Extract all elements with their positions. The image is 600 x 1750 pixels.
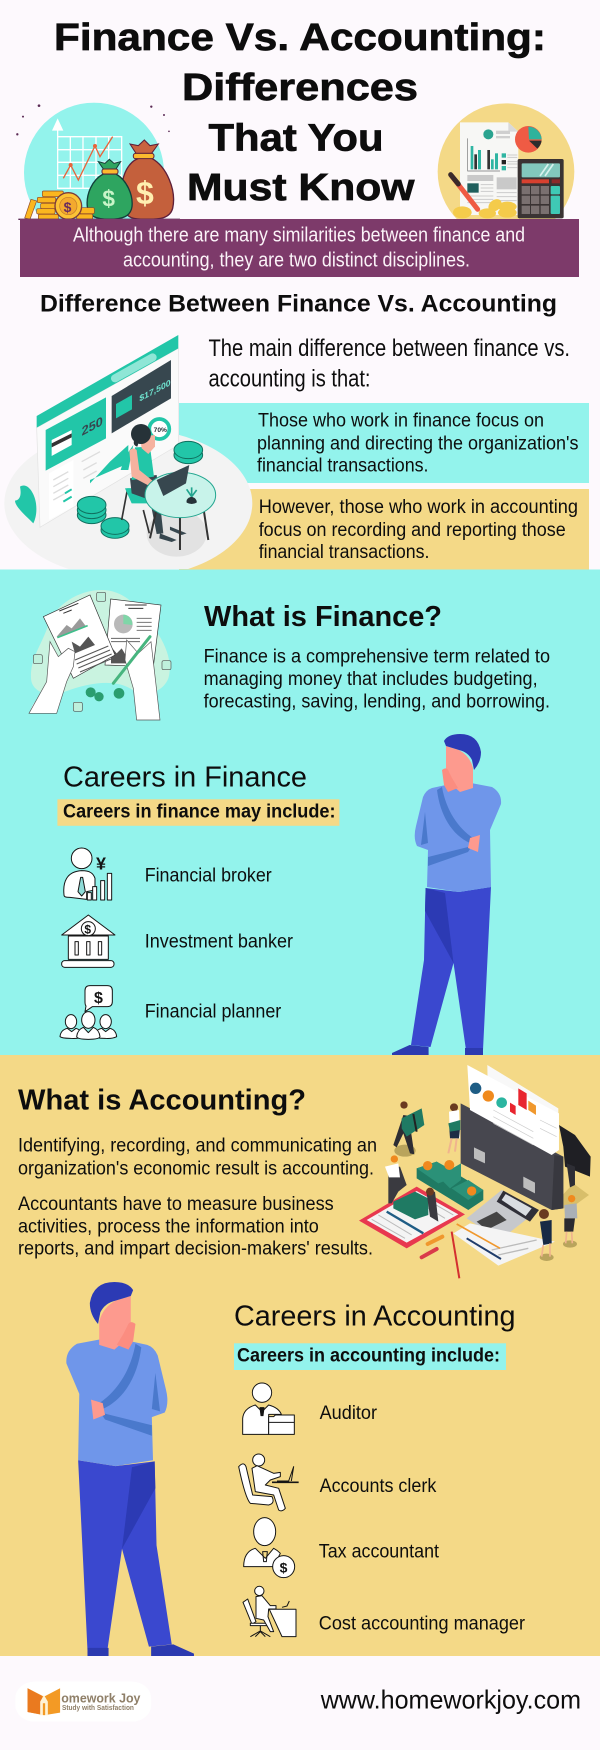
- icon: financial planner: [60, 986, 117, 1039]
- panel: finance section background: [0, 570, 600, 1056]
- illustration: woman at dashboard: [4, 335, 252, 578]
- panel: finance focus: financial transactions.: [257, 456, 428, 477]
- heading: what is accounting: What is Accounting?: [18, 1084, 306, 1116]
- intro banner: Although there are many similarities between finance and: [73, 224, 525, 246]
- intro banner: accounting, they are two distinct disciplines.: [123, 250, 470, 272]
- text: cost accounting manager: Cost accounting manager: [319, 1613, 526, 1634]
- text: accounting definition: organization's economic result is accounting.: [18, 1158, 374, 1179]
- icon: auditor: [243, 1383, 294, 1434]
- text: website url: www.homeworkjoy.com: [320, 1684, 581, 1714]
- illustration: financial report with calculator: [438, 103, 574, 240]
- title: Finance Vs. Accounting:: [54, 17, 546, 59]
- panel: accounting section background: [0, 1055, 600, 1656]
- icon: investment banker: [62, 915, 115, 967]
- heading: what is finance: What is Finance?: [204, 601, 442, 633]
- text: auditor: Auditor: [320, 1403, 378, 1424]
- icon: tax accountant: $: [280, 1559, 288, 1575]
- panel: accounting focus: However, those who work in accounting: [259, 497, 578, 518]
- text: finance definition: forecasting, saving, lending, and borrowing.: [204, 691, 550, 712]
- logo: homework joy: omework Joy: [61, 1691, 141, 1705]
- icon: cost accounting manager: [243, 1586, 296, 1637]
- icon: investment banker: $: [84, 922, 91, 936]
- panel: accounting focus: focus on recording and reporting those: [259, 520, 566, 541]
- panel: finance focus: planning and directing the organization's: [257, 433, 578, 454]
- text: finance definition: managing money that includes budgeting,: [204, 669, 538, 690]
- title: That You: [208, 118, 384, 160]
- illustration: hands with finance papers: [29, 590, 171, 720]
- illustration: money bags and growth chart: $: [136, 175, 154, 211]
- illustration: money bags and growth chart: [16, 102, 180, 220]
- callout: careers in accounting include: Careers in accounting include:: [237, 1346, 500, 1367]
- heading: difference: Difference Between Finance Vs. Accounting: [40, 290, 557, 318]
- title: Must Know: [187, 167, 415, 209]
- heading: careers in finance: Careers in Finance: [63, 762, 307, 794]
- text: accounting definition: Accountants have to measure business: [18, 1194, 334, 1215]
- text: accounting definition: reports, and impart decision-makers' results.: [18, 1238, 373, 1259]
- illustration: woman at dashboard: 70%: [154, 427, 167, 434]
- text: financial planner: Financial planner: [145, 1002, 282, 1023]
- title: Differences: [182, 67, 418, 109]
- text: accounting definition: [18, 1136, 377, 1259]
- illustration: woman at dashboard: $17,500: [139, 378, 171, 404]
- logo: homework joy: [15, 1682, 151, 1722]
- panel: accounting focus: financial transactions.: [259, 542, 429, 563]
- text: finance definition: Finance is a comprehensive term related to: [204, 646, 550, 667]
- figure: thinking man, accounting: [66, 1282, 194, 1656]
- text: accounts clerk: Accounts clerk: [320, 1476, 437, 1497]
- icon: accounts clerk: [239, 1454, 299, 1511]
- figure: thinking man, finance: [392, 734, 501, 1055]
- icon: tax accountant: [244, 1518, 295, 1578]
- heading: careers in accounting: Careers in Accounting: [234, 1301, 516, 1333]
- text: main difference intro: accounting is that:: [208, 366, 370, 392]
- title: [54, 17, 546, 209]
- icon: financial planner: $: [94, 990, 103, 1007]
- illustration: money bags and growth chart: $: [102, 186, 115, 212]
- illustration: isometric briefcase, money and people: [359, 1065, 591, 1278]
- icon: financial broker: ¥: [96, 853, 106, 873]
- panel: finance focus: Those who work in finance focus on: [258, 410, 544, 432]
- intro banner: [20, 219, 579, 277]
- panel: accounting focus: [179, 489, 589, 570]
- text: accounting definition: activities, process the information into: [18, 1216, 319, 1237]
- callout: careers in finance may include: Careers in finance may include:: [63, 802, 336, 823]
- illustration: woman at dashboard: 250: [82, 414, 103, 439]
- panel: finance focus: [179, 403, 589, 483]
- text: accounting definition: Identifying, recording, and communicating an: [18, 1136, 377, 1157]
- text: finance definition: [204, 646, 550, 712]
- text: main difference intro: [208, 335, 570, 392]
- illustration: money bags and growth chart: $: [64, 199, 72, 215]
- text: investment banker: Investment banker: [145, 932, 294, 953]
- text: financial broker: Financial broker: [145, 866, 272, 887]
- text: tax accountant: Tax accountant: [319, 1541, 440, 1562]
- icon: financial broker: [64, 848, 112, 900]
- logo: homework joy: Study with Satisfaction: [62, 1703, 134, 1712]
